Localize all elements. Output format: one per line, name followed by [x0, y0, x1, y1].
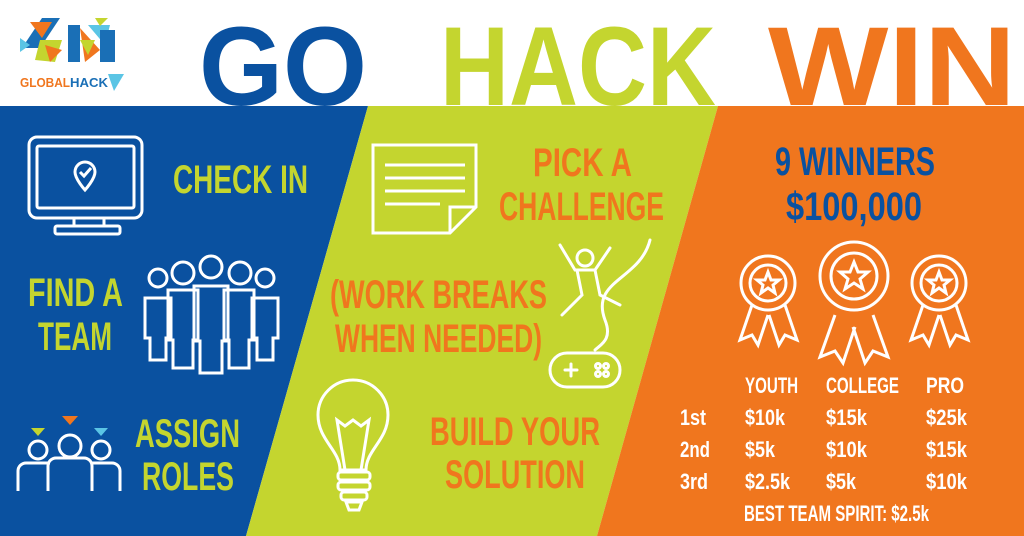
text: BUILD YOUR SOLUTION [430, 410, 600, 497]
logo: HACK [70, 75, 109, 90]
icon: assign roles [18, 416, 120, 491]
prize table: $2.5k [745, 469, 791, 494]
text: BUILD YOUR SOLUTION: BUILD YOUR [430, 410, 600, 454]
text: 9 WINNERS $100,000: $100,000 [786, 185, 922, 229]
prize table: 3rd [680, 469, 708, 494]
text: PICK A CHALLENGE [499, 141, 664, 229]
logo: GLOBAL [20, 75, 70, 90]
title: HACK: HACK [440, 4, 716, 129]
prize table: $25k [926, 405, 968, 430]
text: PICK A CHALLENGE: PICK A [533, 141, 632, 185]
panel: orange [597, 106, 1024, 536]
text: work breaks [330, 273, 547, 361]
prize table [680, 373, 968, 526]
text: ASSIGN ROLES: ASSIGN [135, 412, 240, 456]
prize table: $15k [826, 405, 868, 430]
prize table: COLLEGE [826, 373, 899, 398]
text: PICK A CHALLENGE: CHALLENGE [499, 185, 664, 229]
icon: ribbons [740, 242, 968, 363]
icon: document [373, 145, 476, 233]
logo [20, 18, 124, 91]
text: FIND A TEAM: TEAM [38, 315, 112, 359]
prize table: $10k [826, 437, 868, 462]
text: work breaks: (WORK BREAKS [330, 273, 547, 317]
prize table: BEST TEAM SPIRIT: $2.5k [744, 501, 930, 526]
text: 9 WINNERS $100,000: 9 WINNERS [775, 140, 935, 184]
panel: blue [0, 106, 368, 536]
text: CHECK IN: CHECK IN [173, 158, 308, 202]
icon: team group [145, 256, 278, 373]
prize table: $5k [826, 469, 857, 494]
text: ASSIGN ROLES [135, 412, 240, 499]
icon: lightbulb [318, 380, 388, 510]
text: ASSIGN ROLES: ROLES [142, 455, 234, 499]
prize table: $10k [926, 469, 968, 494]
prize table: YOUTH [745, 373, 798, 398]
panel: green [246, 106, 718, 536]
prize table: $5k [745, 437, 776, 462]
prize table: $15k [926, 437, 968, 462]
text: FIND A TEAM: FIND A [28, 271, 123, 315]
prize table: 1st [680, 405, 707, 430]
title: GO: GO [199, 4, 367, 129]
text: BUILD YOUR SOLUTION: SOLUTION [445, 453, 585, 497]
text: work breaks: WHEN NEEDED) [335, 317, 542, 361]
icon: monitor [29, 137, 142, 234]
title: WIN: WIN [768, 4, 1016, 129]
prize table: 2nd [680, 437, 710, 462]
prize table: $10k [745, 405, 786, 430]
prize table: PRO [926, 373, 964, 398]
text: FIND A TEAM [28, 271, 123, 359]
text: 9 WINNERS $100,000 [775, 140, 935, 229]
icon: jumping person with gamepad [550, 240, 650, 387]
